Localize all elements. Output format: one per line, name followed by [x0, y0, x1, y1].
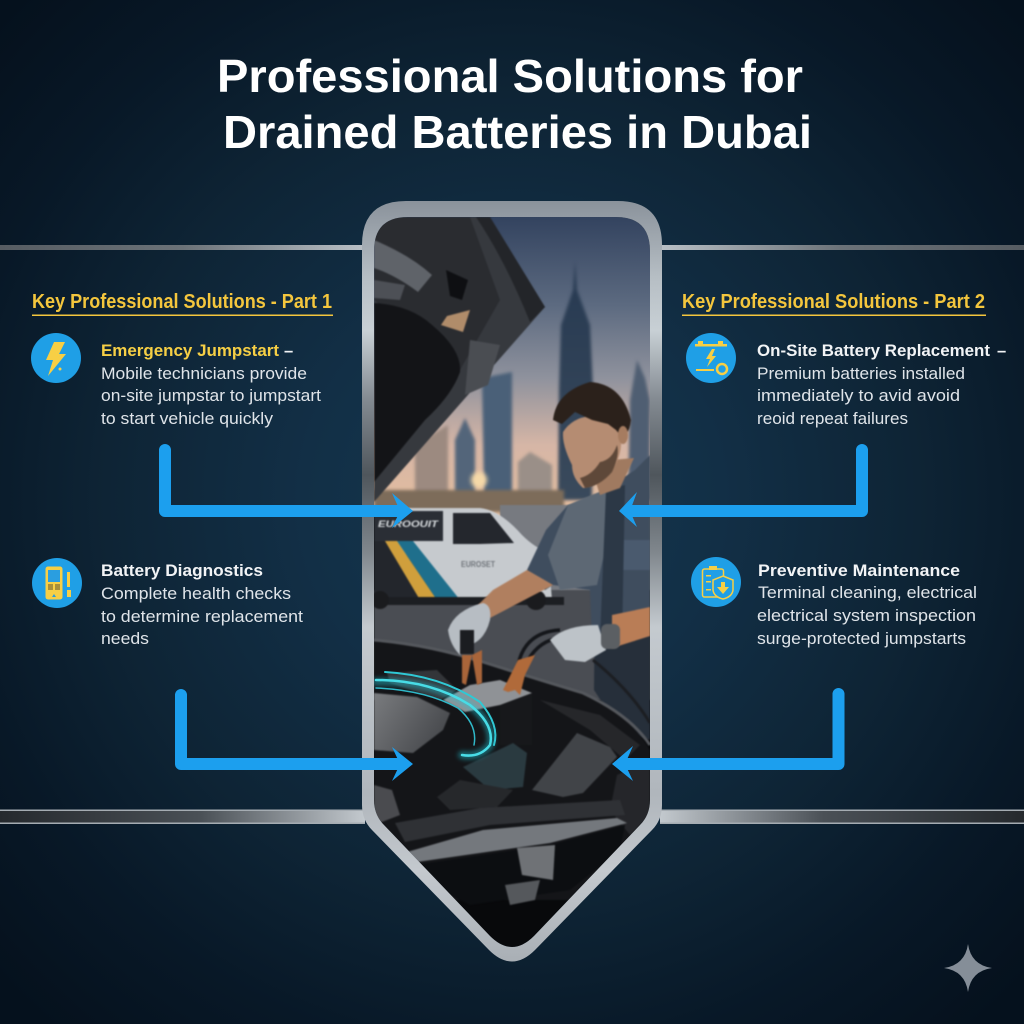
ground [374, 505, 650, 700]
text: preventive maintenance: surge-protected jumpstarts [757, 629, 966, 648]
open hood [374, 217, 545, 502]
jumper clamps and gloves [448, 603, 650, 723]
title: Professional Solutions for [217, 50, 803, 102]
text: battery diagnostics [101, 562, 303, 648]
text: battery diagnostics: Battery Diagnostics [101, 562, 263, 580]
text: emergency jumpstart: on-site jumpstar to jumpstart [101, 386, 321, 405]
text: battery replacement: – [997, 342, 1006, 360]
heading part 2: Key Professional Solutions - Part 2 [682, 291, 985, 313]
text: emergency jumpstart: Emergency Jumpstart [101, 342, 280, 360]
horizontal metal bars [0, 245, 1024, 824]
text: battery replacement [757, 342, 1006, 428]
text: battery replacement: On-Site Battery Replacement [757, 342, 991, 360]
text: preventive maintenance: electrical system inspection [757, 606, 976, 625]
text: emergency jumpstart: Mobile technicians provide [101, 364, 307, 383]
icon: checklist shield [691, 557, 741, 607]
sky [374, 217, 650, 517]
arrow: battery replacement to photo [619, 450, 862, 527]
text: preventive maintenance: Preventive Maintenance [758, 562, 960, 580]
metal shield frame [362, 201, 662, 962]
service van: EUROOUIT [378, 519, 440, 529]
title: Drained Batteries in Dubai [223, 106, 812, 158]
Dubai skyline [374, 262, 650, 512]
icon: sparkle [944, 944, 992, 992]
text: battery replacement: immediately to avid avoid [757, 386, 960, 405]
engine bay [374, 640, 650, 905]
text: battery replacement: reoid repeat failures [757, 409, 908, 428]
technician [478, 382, 650, 740]
central photo: technician jumpstarting a car in Dubai [371, 217, 650, 957]
text: emergency jumpstart [101, 342, 321, 428]
title [217, 50, 812, 158]
text: emergency jumpstart: – [284, 342, 293, 360]
icon: battery replacement [686, 333, 736, 383]
text: battery diagnostics: to determine replacement [101, 607, 303, 626]
electric current glow [376, 672, 495, 756]
heading part 1: Key Professional Solutions - Part 1 [32, 291, 332, 313]
text: preventive maintenance [757, 562, 977, 648]
arrow: jumpstart to photo [165, 450, 413, 528]
icon: lightning bolt [31, 333, 81, 383]
text: emergency jumpstart: to start vehicle quickly [101, 409, 274, 428]
panel: solutions part 1 [31, 291, 333, 648]
text: preventive maintenance: Terminal cleaning, electrical [758, 583, 977, 602]
text: battery diagnostics: needs [101, 629, 149, 648]
icon: battery tester [32, 558, 82, 608]
text: battery replacement: Premium batteries installed [757, 364, 965, 383]
arrow: maintenance to photo [612, 694, 838, 781]
text: battery diagnostics: Complete health checks [101, 584, 291, 603]
service van [371, 508, 564, 610]
arrow: diagnostics to photo [181, 695, 413, 781]
service van: EUROSET [461, 560, 495, 569]
panel: solutions part 2 [682, 291, 1006, 648]
